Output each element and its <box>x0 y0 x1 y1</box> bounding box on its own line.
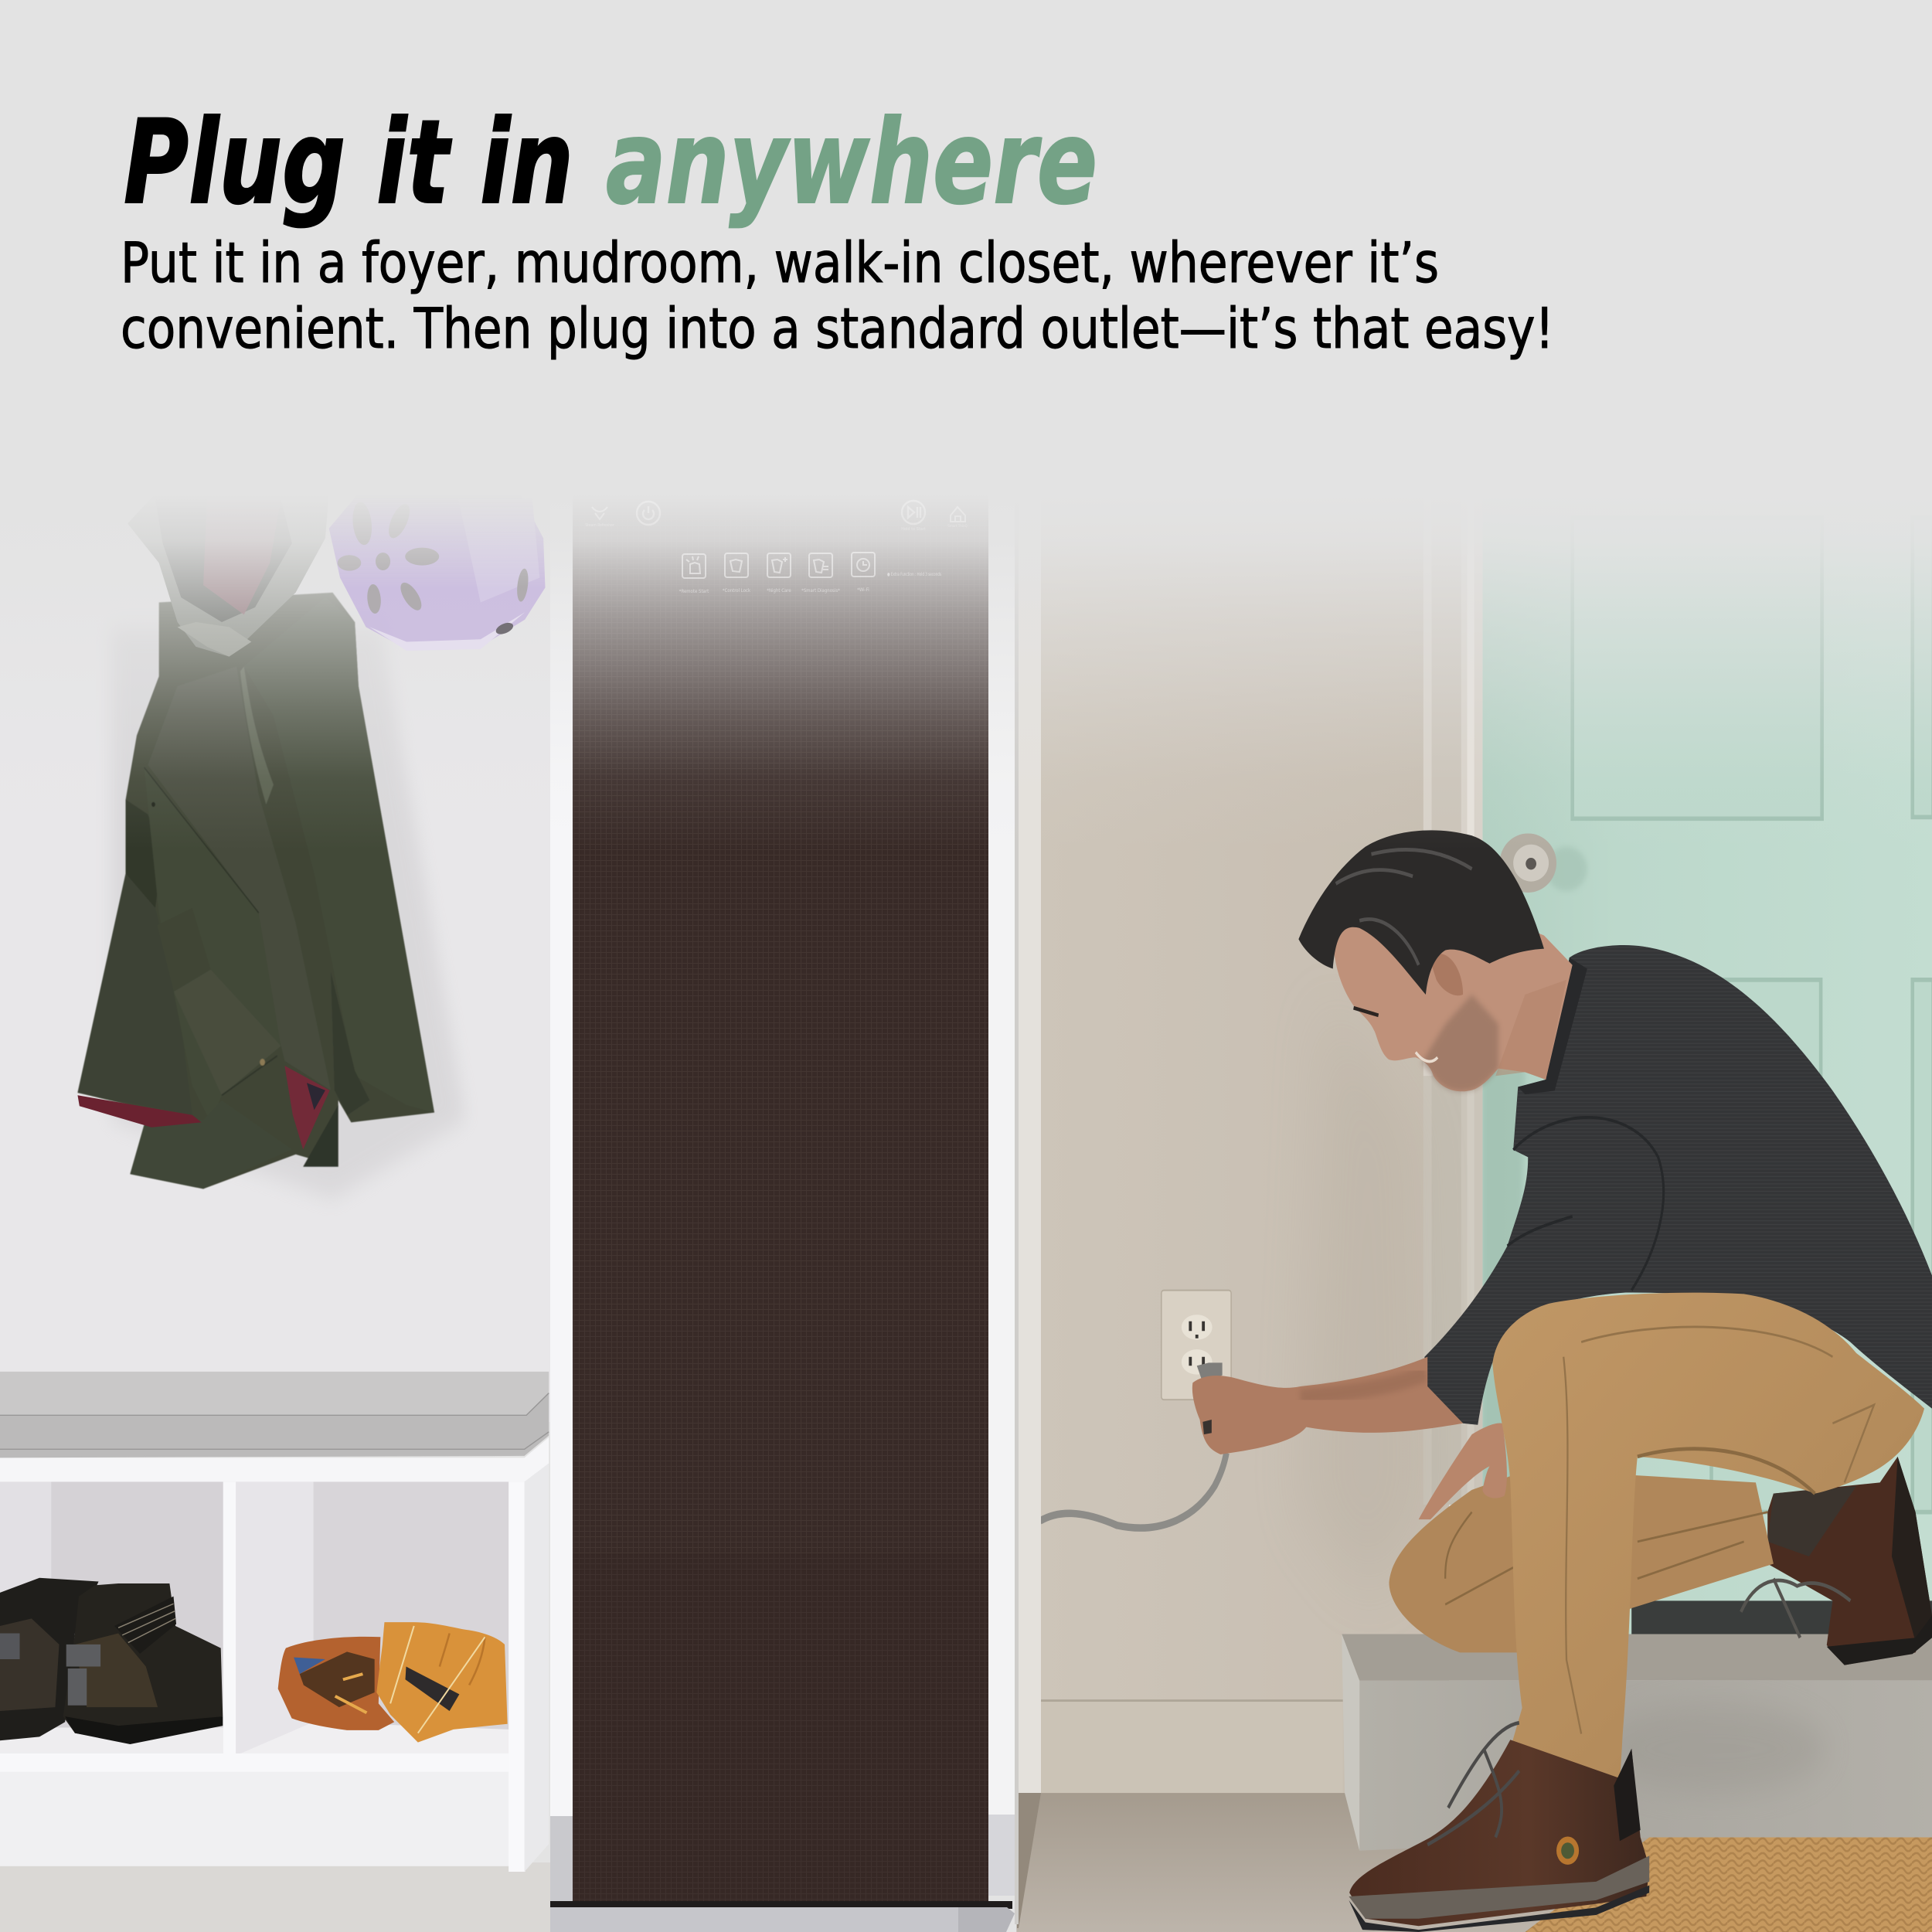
panel: coat on wall <box>77 494 466 1199</box>
coat body <box>77 593 434 1189</box>
doormat <box>1525 1838 1932 1932</box>
baseboard <box>1040 1701 1343 1793</box>
front leg pants <box>1492 1293 1924 1786</box>
icon: home: Smart ThinQ <box>947 524 968 529</box>
left wall <box>0 495 550 1422</box>
icon: remote start <box>682 554 706 578</box>
control panel labels: *Control Lock <box>723 588 751 594</box>
control panel labels: *Remote Start <box>679 589 709 594</box>
icon: helmet <box>329 510 546 646</box>
man's shadow on wall <box>1301 995 1430 1600</box>
concrete step <box>1342 1634 1932 1851</box>
bench frame <box>0 1437 549 1872</box>
control panel on cabinet <box>585 501 968 594</box>
icon: wall outlet <box>1162 1291 1231 1400</box>
man <box>1192 830 1932 1932</box>
control panel labels: *Wi-Fi <box>857 587 869 593</box>
floor <box>1016 1793 1932 1932</box>
head and neck <box>1332 883 1573 1091</box>
icon: steam <box>585 507 614 528</box>
knee hand <box>1419 1423 1507 1519</box>
arm and hand <box>1192 1357 1463 1454</box>
hair <box>1298 830 1544 995</box>
icon: night care <box>767 553 791 577</box>
description text <box>121 230 1554 361</box>
title <box>124 96 1097 230</box>
cubby left <box>0 1481 225 1755</box>
power cord <box>1040 1453 1226 1528</box>
icon: door knob <box>1500 833 1587 893</box>
cabinet right frame <box>987 495 1019 1924</box>
coat hood <box>128 494 329 657</box>
description text: Put it in a foyer, mudroom, walk-in closet, wherever it’s <box>121 230 1439 295</box>
door threshold <box>1631 1600 1932 1638</box>
description text: convenient. Then plug into a standard outlet—it’s that easy! <box>121 296 1554 361</box>
icon: start pause button: Hold to Start <box>901 527 926 532</box>
icon: control lock <box>725 553 748 577</box>
panel: doorway, step and man <box>1016 492 1932 1932</box>
coat plaid lining <box>77 1066 330 1149</box>
panel: bench with cubbies <box>0 1372 552 1932</box>
back leg pants <box>1389 1475 1774 1652</box>
bench cushion <box>0 1372 549 1458</box>
control panel labels: *Night Care <box>767 588 791 594</box>
floor left <box>0 1862 552 1932</box>
panel: clothing steamer cabinet <box>550 495 1041 1932</box>
door trim <box>1423 492 1482 1505</box>
cabinet side panel <box>1017 495 1041 1793</box>
cubby right <box>236 1481 509 1755</box>
icon: smart diagnosis <box>809 553 832 577</box>
floor shadow beside cabinet <box>1017 1793 1041 1928</box>
icon: plug <box>1197 1362 1223 1383</box>
coat shadow <box>111 627 466 1199</box>
control panel labels <box>679 572 941 594</box>
icon: power button <box>637 502 660 525</box>
cabinet left frame <box>550 495 573 1901</box>
sweater <box>1424 945 1932 1425</box>
back boot <box>1741 1457 1932 1665</box>
control panel labels: ● Extra Function : Hold 3 seconds <box>887 572 941 577</box>
cabinet silver base <box>550 1901 1015 1932</box>
title: anywhere: anywhere <box>606 96 1097 230</box>
top fade overlay <box>0 464 1932 850</box>
panel: right wall with outlet side <box>1039 495 1449 1808</box>
front boot <box>1349 1723 1649 1932</box>
cabinet dark front panel <box>573 495 988 1901</box>
title: plug it in: Plug it in <box>124 96 573 230</box>
icon: cleats <box>0 1578 223 1744</box>
icon: home <box>947 507 968 529</box>
icon: start pause button <box>901 501 926 532</box>
icon: baseball gloves <box>278 1622 508 1743</box>
icon: steam: Steam Refresher <box>585 523 614 528</box>
door <box>1482 492 1932 1638</box>
icon: wi-fi clock <box>852 553 875 577</box>
control panel labels: *Smart Diagnosis* <box>801 588 840 594</box>
